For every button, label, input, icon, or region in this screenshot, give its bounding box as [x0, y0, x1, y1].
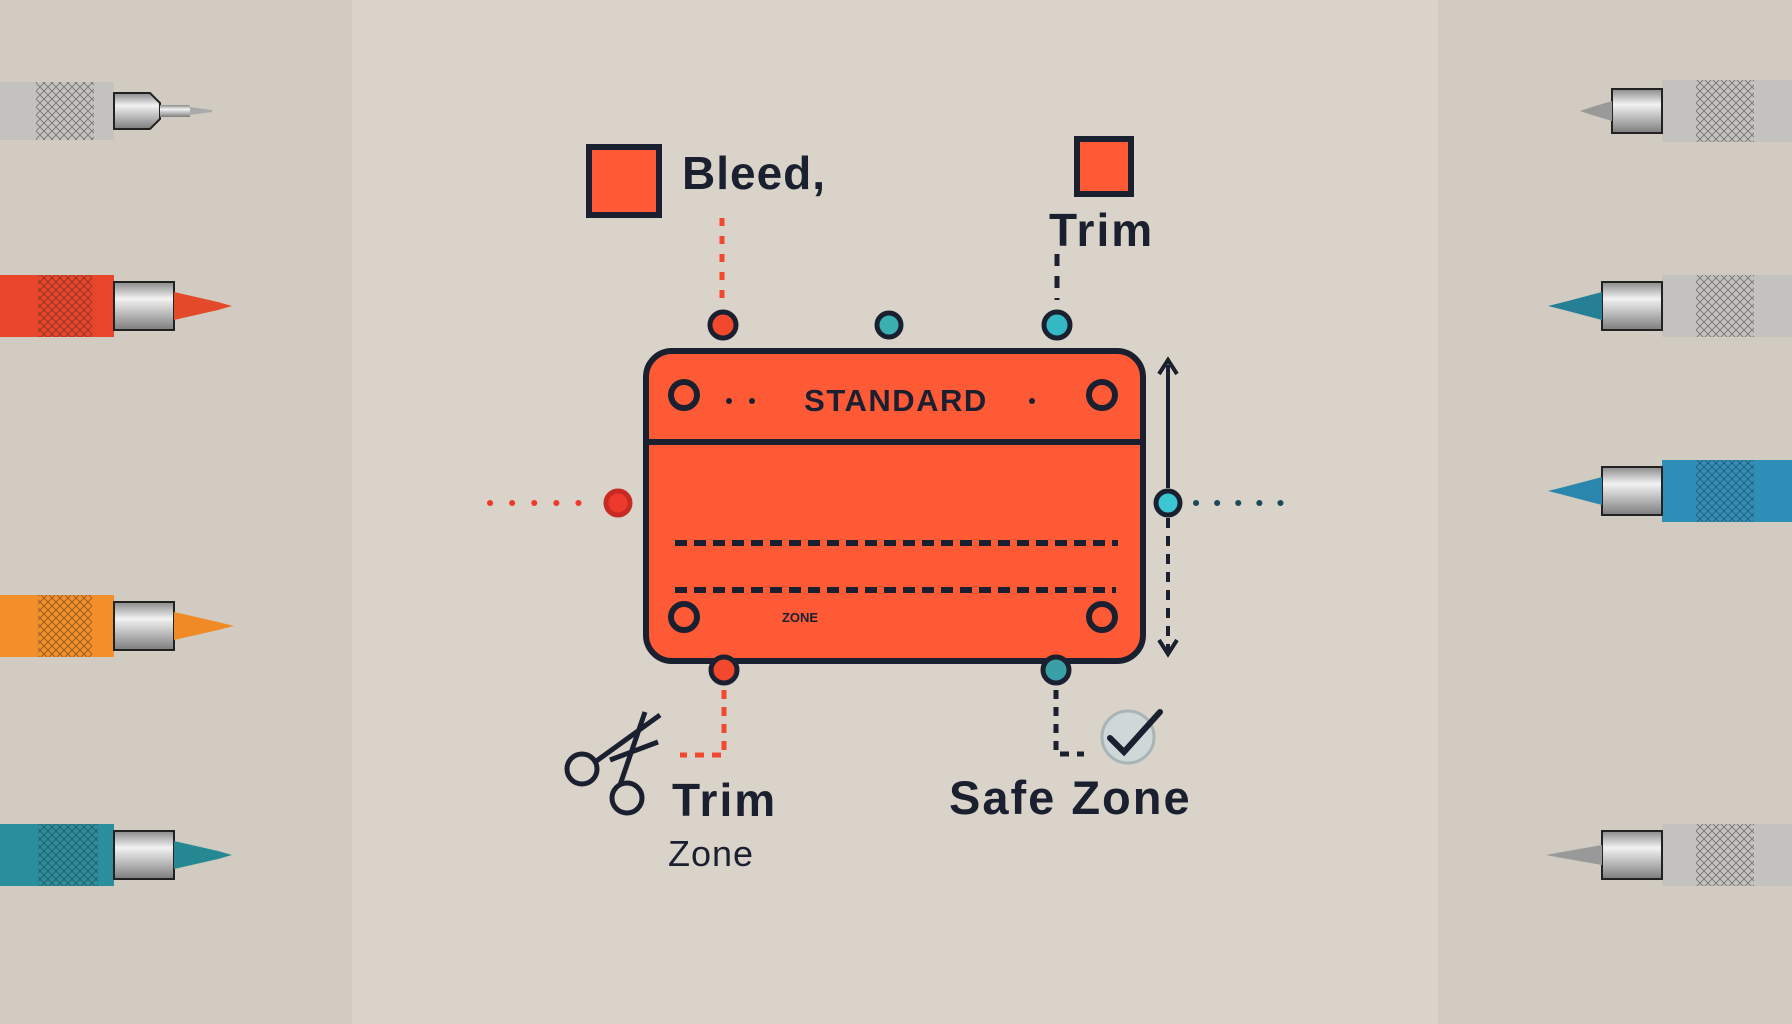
- legend: bleed: Bleed,: [682, 147, 826, 199]
- pens: left: [0, 82, 234, 886]
- card: standard: ZONE: [782, 610, 818, 625]
- pens: right: [1546, 80, 1792, 886]
- label: trim zone: Zone: [668, 833, 754, 874]
- icon: check: [1102, 711, 1160, 763]
- marker circles: [606, 312, 1180, 683]
- label: safe zone: Safe Zone: [949, 771, 1192, 824]
- legend: trim: [1049, 139, 1154, 256]
- arrow: vertical dimension: [1159, 360, 1177, 654]
- card: standard: [646, 351, 1143, 661]
- legend: bleed: [589, 147, 826, 215]
- icon: scissors: [567, 712, 660, 813]
- dotted guide lines: [490, 218, 1290, 755]
- label: trim zone: Trim: [672, 774, 777, 826]
- card: standard: STANDARD: [804, 383, 988, 418]
- label: trim zone: [668, 774, 777, 874]
- legend: trim: Trim: [1049, 204, 1154, 256]
